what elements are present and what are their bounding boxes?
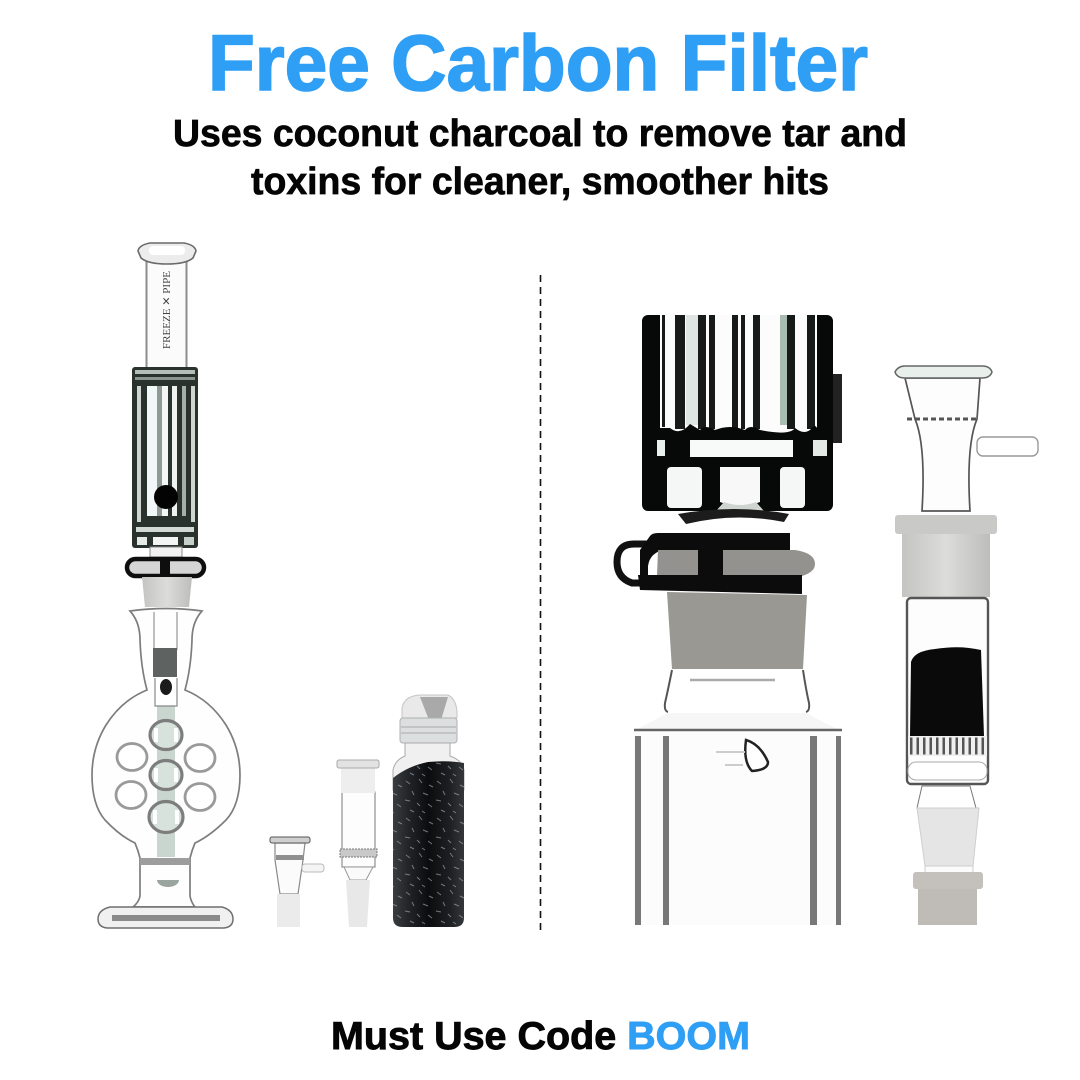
subtitle [173, 113, 907, 203]
side clip tab [833, 374, 842, 443]
glass chamber [907, 598, 988, 784]
close-up: carbon filter assembly [895, 366, 1038, 925]
jar glass neck [393, 743, 464, 790]
mouthpiece tube with brand text [138, 243, 196, 368]
title: Free Carbon Filter [208, 18, 868, 107]
foot bubble [157, 880, 179, 887]
neck under chamber [677, 509, 790, 535]
subtitle: toxins for cleaner, smoother hits [251, 161, 829, 203]
tube feet [660, 424, 817, 433]
center percolator stem [157, 706, 175, 857]
bowl [895, 366, 992, 511]
tapered joint [913, 786, 983, 925]
bowl handle [977, 437, 1038, 456]
black keck clip [617, 533, 790, 583]
frosted taper joint [638, 545, 815, 669]
band above foot [140, 858, 190, 865]
snowflake emblem [153, 648, 177, 677]
product: small bowl piece [270, 837, 324, 927]
charcoal fill [393, 761, 464, 927]
mouthpiece tube with brand text: FREEZE ✕ PIPE [162, 271, 173, 349]
product: carbon filter adapter [337, 760, 379, 927]
keck clip ring [127, 557, 204, 577]
charcoal fill [910, 647, 984, 736]
frosted sleeve [895, 515, 997, 597]
product: coconut charcoal jar [393, 695, 464, 927]
frosted joint [142, 577, 192, 607]
small black ball [160, 679, 172, 695]
glass jar under joint [633, 670, 842, 925]
black ball [154, 485, 178, 509]
dark chamber with tubes [642, 315, 833, 511]
neck to clip [150, 547, 182, 557]
freezable coil chamber [132, 367, 198, 548]
glass body [92, 608, 240, 907]
ring holes [116, 720, 215, 832]
dashed divider [540, 275, 542, 930]
jar cap [400, 695, 457, 743]
perc screen [908, 736, 987, 780]
close-up: chamber and joint [617, 315, 842, 925]
base [98, 907, 233, 928]
subtitle: Uses coconut charcoal to remove tar and [173, 113, 907, 155]
call to action: Must Use Code BOOM [331, 1015, 750, 1058]
product: full water pipe [92, 243, 240, 928]
downstem tube [154, 612, 177, 650]
